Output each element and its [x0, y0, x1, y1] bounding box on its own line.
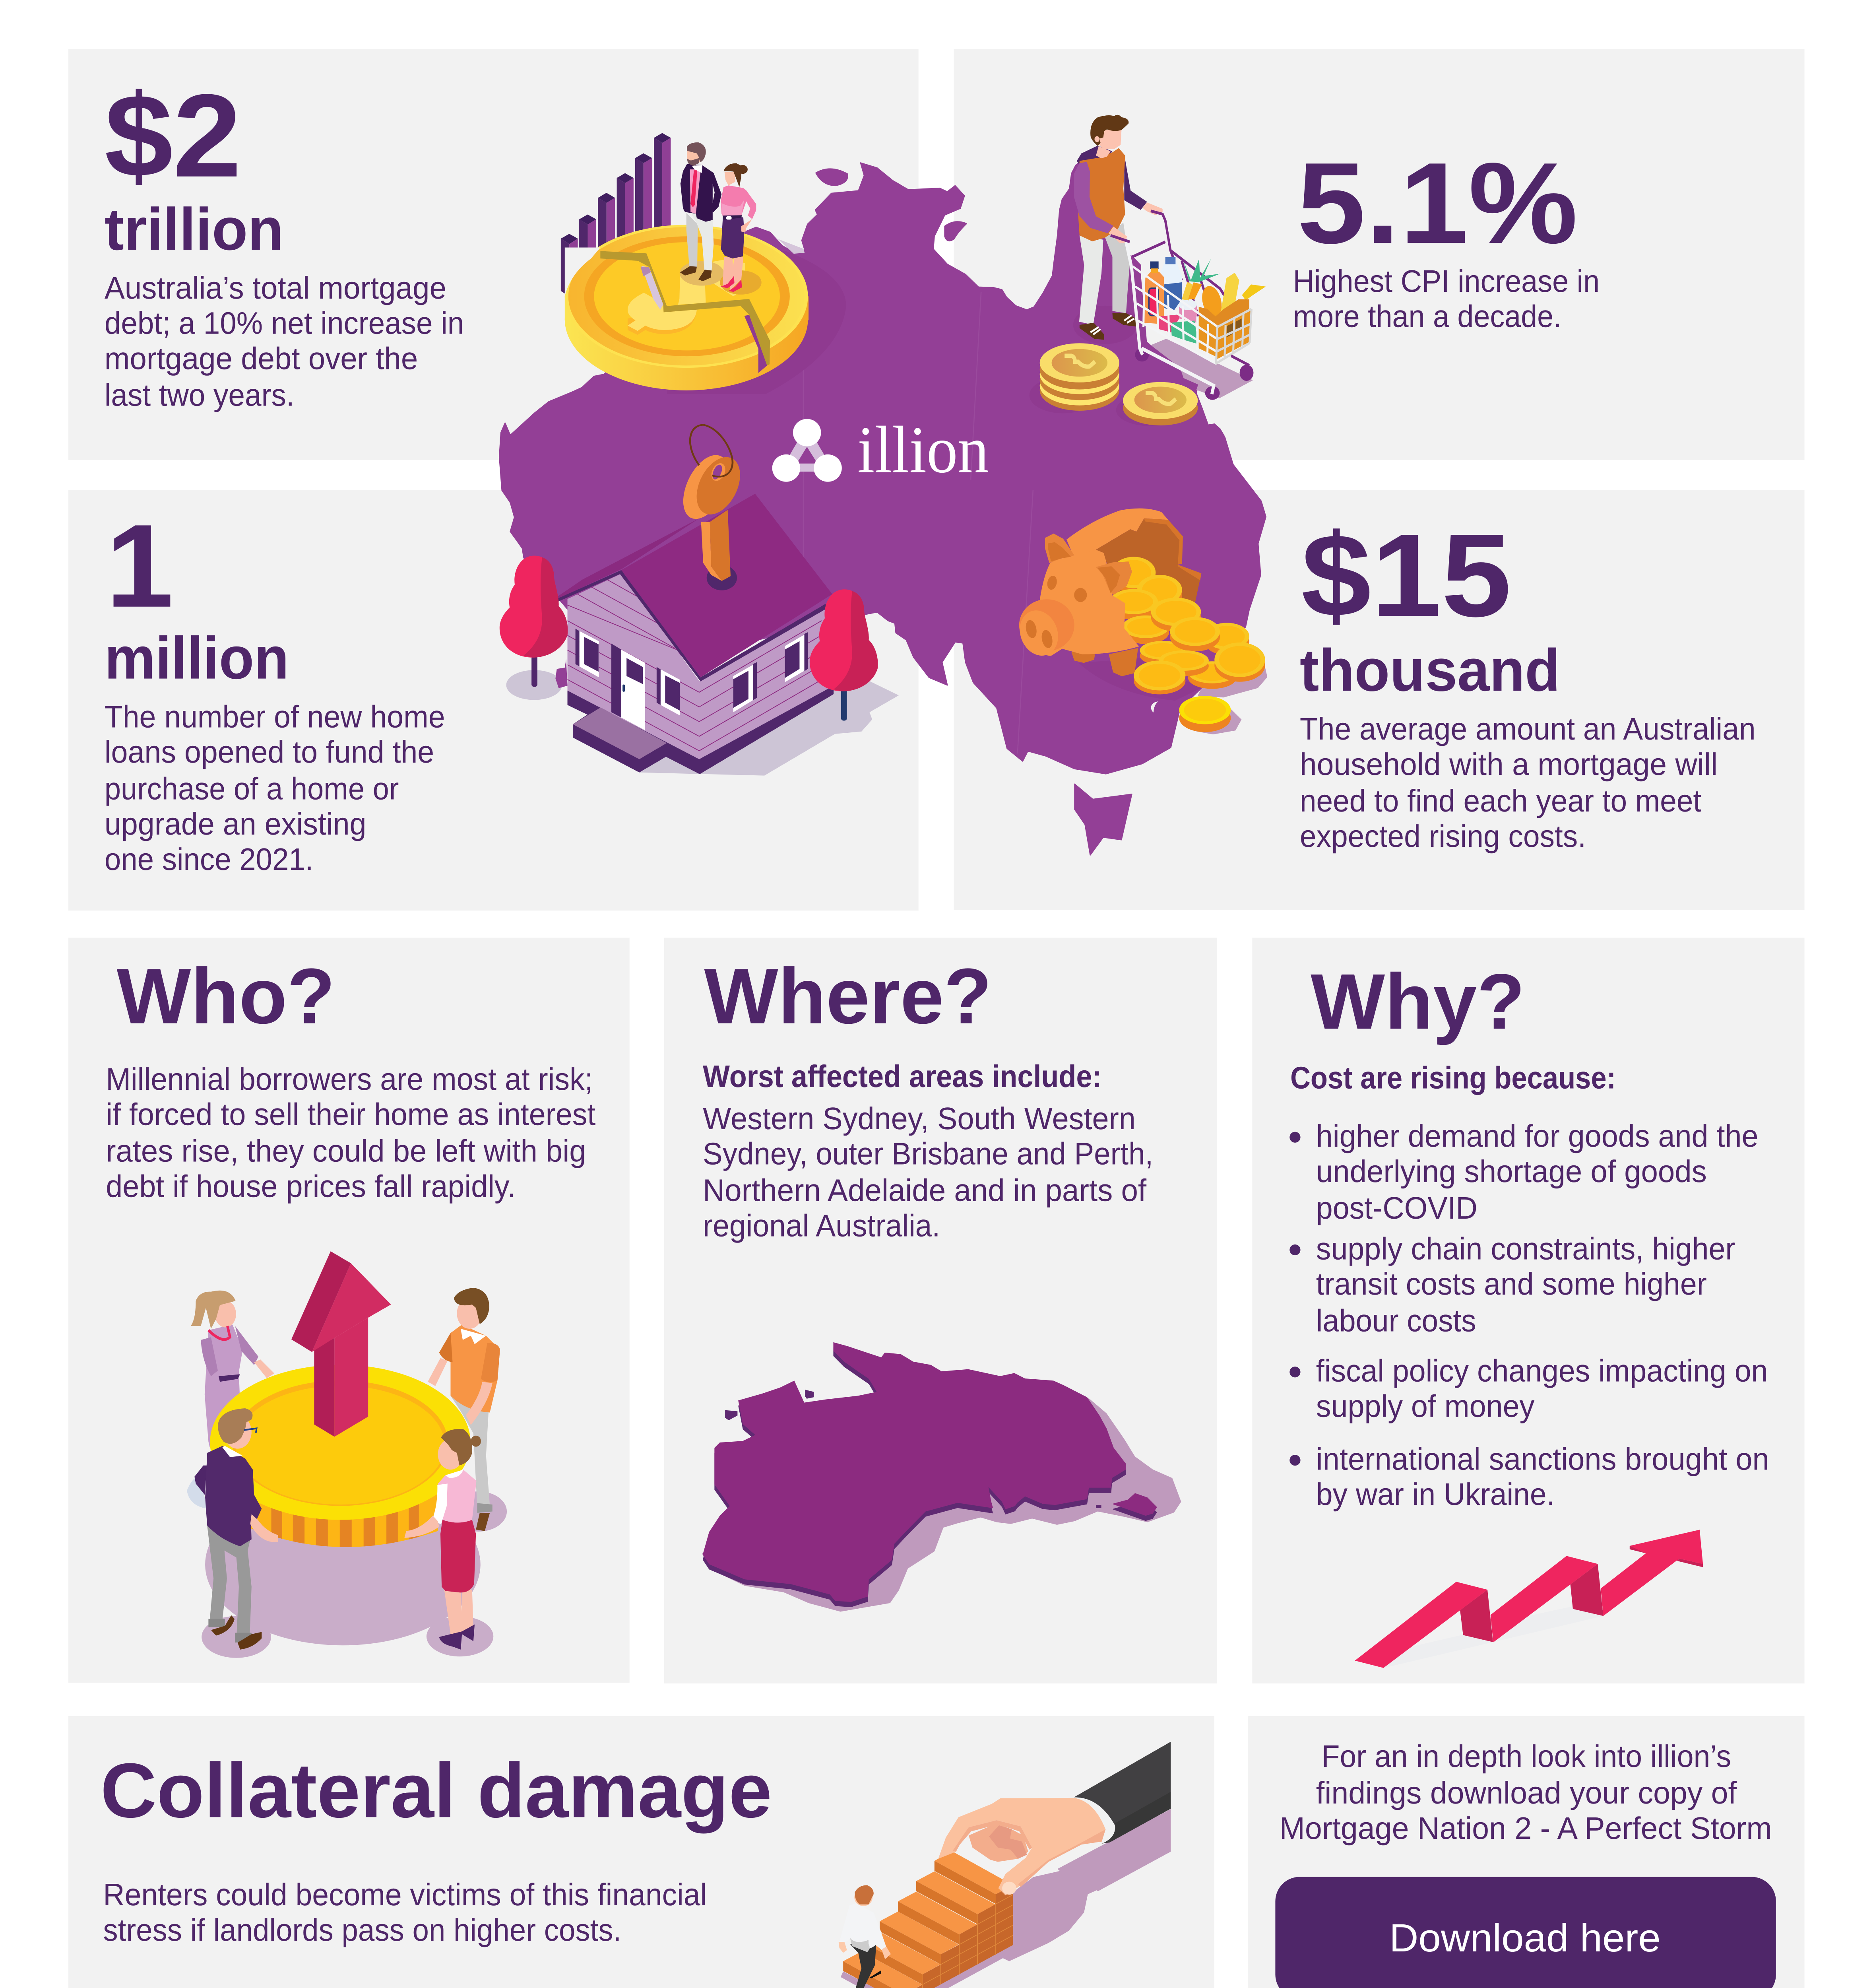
description: mortgage debt: last two years. — [105, 377, 295, 413]
arrow shadow — [1384, 1606, 1603, 1668]
who illustration: four people around a coin — [187, 1251, 507, 1658]
bullet list: reasons: by war in Ukraine. — [1316, 1477, 1555, 1512]
piggy face — [1014, 534, 1139, 660]
stat: $2: $2 — [105, 70, 242, 202]
subheading: why: Cost are rising because: — [1290, 1060, 1616, 1095]
stat: 1: 1 — [106, 501, 174, 633]
why illustration: rising zigzag arrow — [1355, 1530, 1703, 1668]
where illustration: isometric map of Australia — [702, 1342, 1181, 1612]
person: woman in pink — [721, 163, 756, 292]
shopper — [1074, 115, 1163, 340]
coin — [210, 1365, 471, 1562]
tree shadow left — [506, 670, 562, 700]
panel: household costs — [954, 490, 1805, 910]
description: mortgage debt: mortgage debt over the — [105, 341, 418, 376]
description: who: debt if house prices fall rapidly. — [106, 1169, 516, 1204]
person: man in orange shirt — [428, 1288, 500, 1531]
description: download: findings download your copy of — [1316, 1775, 1737, 1810]
description: new home loans: loans opened to fund the — [105, 734, 434, 769]
bullet list: reasons: underlying shortage of goods — [1316, 1153, 1707, 1189]
icon: coin with bars and couple — [561, 133, 846, 394]
description: where: regional Australia. — [703, 1208, 940, 1243]
piggy shell — [1020, 509, 1201, 656]
panel: new home loans — [68, 490, 919, 911]
description: where: Western Sydney, South Western — [703, 1101, 1136, 1136]
description: CPI: Highest CPI increase in — [1293, 263, 1600, 299]
bullet list: reasons: international sanctions brought on — [1316, 1441, 1769, 1477]
heading: Who?: Who? — [117, 953, 335, 1041]
shadows — [202, 1483, 507, 1658]
description: CPI — [1293, 263, 1600, 334]
sleeve — [1074, 1742, 1171, 1844]
windows — [576, 629, 808, 715]
person: man with glasses — [187, 1408, 278, 1650]
coin pile shadow — [1198, 666, 1267, 697]
bullet list: reasons: supply chain constraints, higher — [1316, 1231, 1736, 1266]
panel: collateral damage — [68, 1716, 1214, 1988]
map side faces — [703, 1347, 1157, 1607]
description: household costs: need to find each year to meet — [1300, 783, 1702, 818]
bullet list: reasons: transit costs and some higher — [1316, 1266, 1707, 1301]
stat unit: million: million — [105, 625, 289, 692]
stat: $15: $15 — [1301, 510, 1511, 642]
tree right — [810, 589, 878, 721]
door — [611, 644, 645, 730]
heading: Where?: Where? — [704, 953, 992, 1041]
description: collateral damage: stress if landlords pass on higher costs. — [103, 1912, 621, 1947]
house shadow — [639, 678, 899, 776]
description: household costs: household with a mortgage will — [1300, 746, 1718, 782]
description: where: Northern Adelaide and in parts of — [703, 1173, 1147, 1208]
heading: Collateral damage: Collateral damage — [101, 1748, 772, 1835]
description: who: if forced to sell their home as interest — [106, 1097, 596, 1132]
small inlet — [1151, 701, 1158, 712]
bullet list: reasons: higher demand for goods and the — [1316, 1118, 1759, 1153]
up arrow — [291, 1251, 391, 1437]
single coin — [1116, 382, 1198, 426]
panel: download — [1248, 1716, 1805, 1988]
description: mortgage debt: debt; a 10% net increase in — [105, 305, 464, 341]
key — [674, 425, 748, 590]
description: collateral damage: Renters could become victims of this financial — [103, 1877, 707, 1912]
spilled coins — [1110, 557, 1265, 732]
bullet list: reasons: post-COVID — [1316, 1190, 1478, 1225]
description: CPI: more than a decade. — [1293, 299, 1562, 334]
subheading: where: Worst affected areas include: — [703, 1058, 1102, 1094]
bullet list: reasons: supply of money — [1316, 1388, 1535, 1423]
shopper shadow — [1073, 306, 1137, 344]
panel: mortgage debt — [68, 49, 919, 460]
description: who: rates rise, they could be left with big — [106, 1133, 586, 1169]
description: new home loans: upgrade an existing — [105, 806, 366, 841]
cart shadow — [1151, 339, 1253, 398]
coin — [565, 225, 809, 390]
house walls — [568, 574, 834, 759]
coin shadow — [667, 251, 846, 394]
stat: 5.1%: 5.1% — [1297, 140, 1578, 269]
panel: CPI — [954, 49, 1805, 460]
description: download: Mortgage Nation 2 - A Perfect Storm — [1280, 1810, 1772, 1846]
panel: who — [68, 938, 630, 1683]
piggy legs — [1071, 648, 1138, 676]
description: where — [703, 1101, 1153, 1243]
tree left — [500, 555, 568, 687]
pig shadow — [1078, 658, 1201, 701]
panel: why — [1252, 938, 1805, 1683]
description: mortgage debt — [105, 270, 464, 413]
description: download — [1280, 1738, 1772, 1846]
description: new home loans: The number of new home — [105, 699, 445, 734]
description: where: Sydney, outer Brisbane and Perth, — [703, 1136, 1153, 1171]
arrow folds — [1460, 1546, 1703, 1642]
logo: illion: illion — [857, 412, 989, 487]
shopping cart — [1111, 211, 1266, 400]
map state borders — [803, 292, 1033, 753]
description: who: Millennial borrowers are most at risk; — [106, 1061, 593, 1097]
map shadow — [702, 1398, 1181, 1612]
person: woman in pink blouse — [404, 1429, 481, 1650]
arrow ribbon — [1355, 1530, 1703, 1668]
small coast fragment — [555, 659, 568, 688]
roof — [547, 494, 832, 681]
stat unit: trillion: trillion — [105, 197, 283, 263]
button: download here — [1275, 1877, 1776, 1988]
person: man in suit — [680, 142, 721, 281]
description: collateral damage — [103, 1877, 707, 1947]
panel: where — [664, 938, 1217, 1683]
single coin shadow — [1196, 709, 1241, 734]
description: household costs: expected rising costs. — [1300, 818, 1586, 854]
description: new home loans: one since 2021. — [105, 841, 313, 877]
pale coast shadow — [778, 239, 805, 254]
base and step — [568, 686, 834, 774]
map: Australia silhouette — [499, 148, 1266, 855]
stat unit: thousand: thousand — [1300, 638, 1560, 704]
siding lines — [568, 580, 822, 751]
icon: shopper with cart and coins — [1030, 115, 1266, 426]
bullet list: reasons: labour costs — [1316, 1303, 1476, 1338]
description: download: For an in depth look into illion’s — [1321, 1738, 1731, 1774]
heading: Why?: Why? — [1311, 958, 1525, 1046]
description: new home loans — [105, 699, 445, 877]
collateral illustration: hand building stairs — [839, 1742, 1171, 1988]
icon: house with key and trees — [500, 425, 899, 776]
icon: piggy bank with coins — [1014, 509, 1267, 734]
map land — [703, 1342, 1157, 1602]
shadow — [841, 1809, 1171, 1988]
description: new home loans: purchase of a home or — [105, 771, 399, 806]
central Australia map with logo — [499, 148, 1266, 855]
description: household costs: The average amount an Australian — [1300, 711, 1756, 746]
bullet list: reasons — [1289, 1118, 1769, 1512]
button: download here: Download here — [1389, 1918, 1661, 1961]
description: mortgage debt: Australia’s total mortgage — [105, 270, 446, 305]
description: household costs — [1300, 711, 1756, 854]
isolated islands — [725, 1390, 814, 1420]
hand — [938, 1798, 1105, 1895]
person: woman with ponytail — [191, 1291, 274, 1447]
person: walking man — [839, 1885, 891, 1988]
coin stack — [1030, 343, 1119, 413]
bar chart behind coin — [561, 133, 671, 296]
logo: illion — [772, 412, 989, 487]
description: who — [106, 1061, 596, 1204]
stairs — [843, 1851, 1013, 1988]
bullet list: reasons: fiscal policy changes impacting on — [1316, 1353, 1768, 1388]
